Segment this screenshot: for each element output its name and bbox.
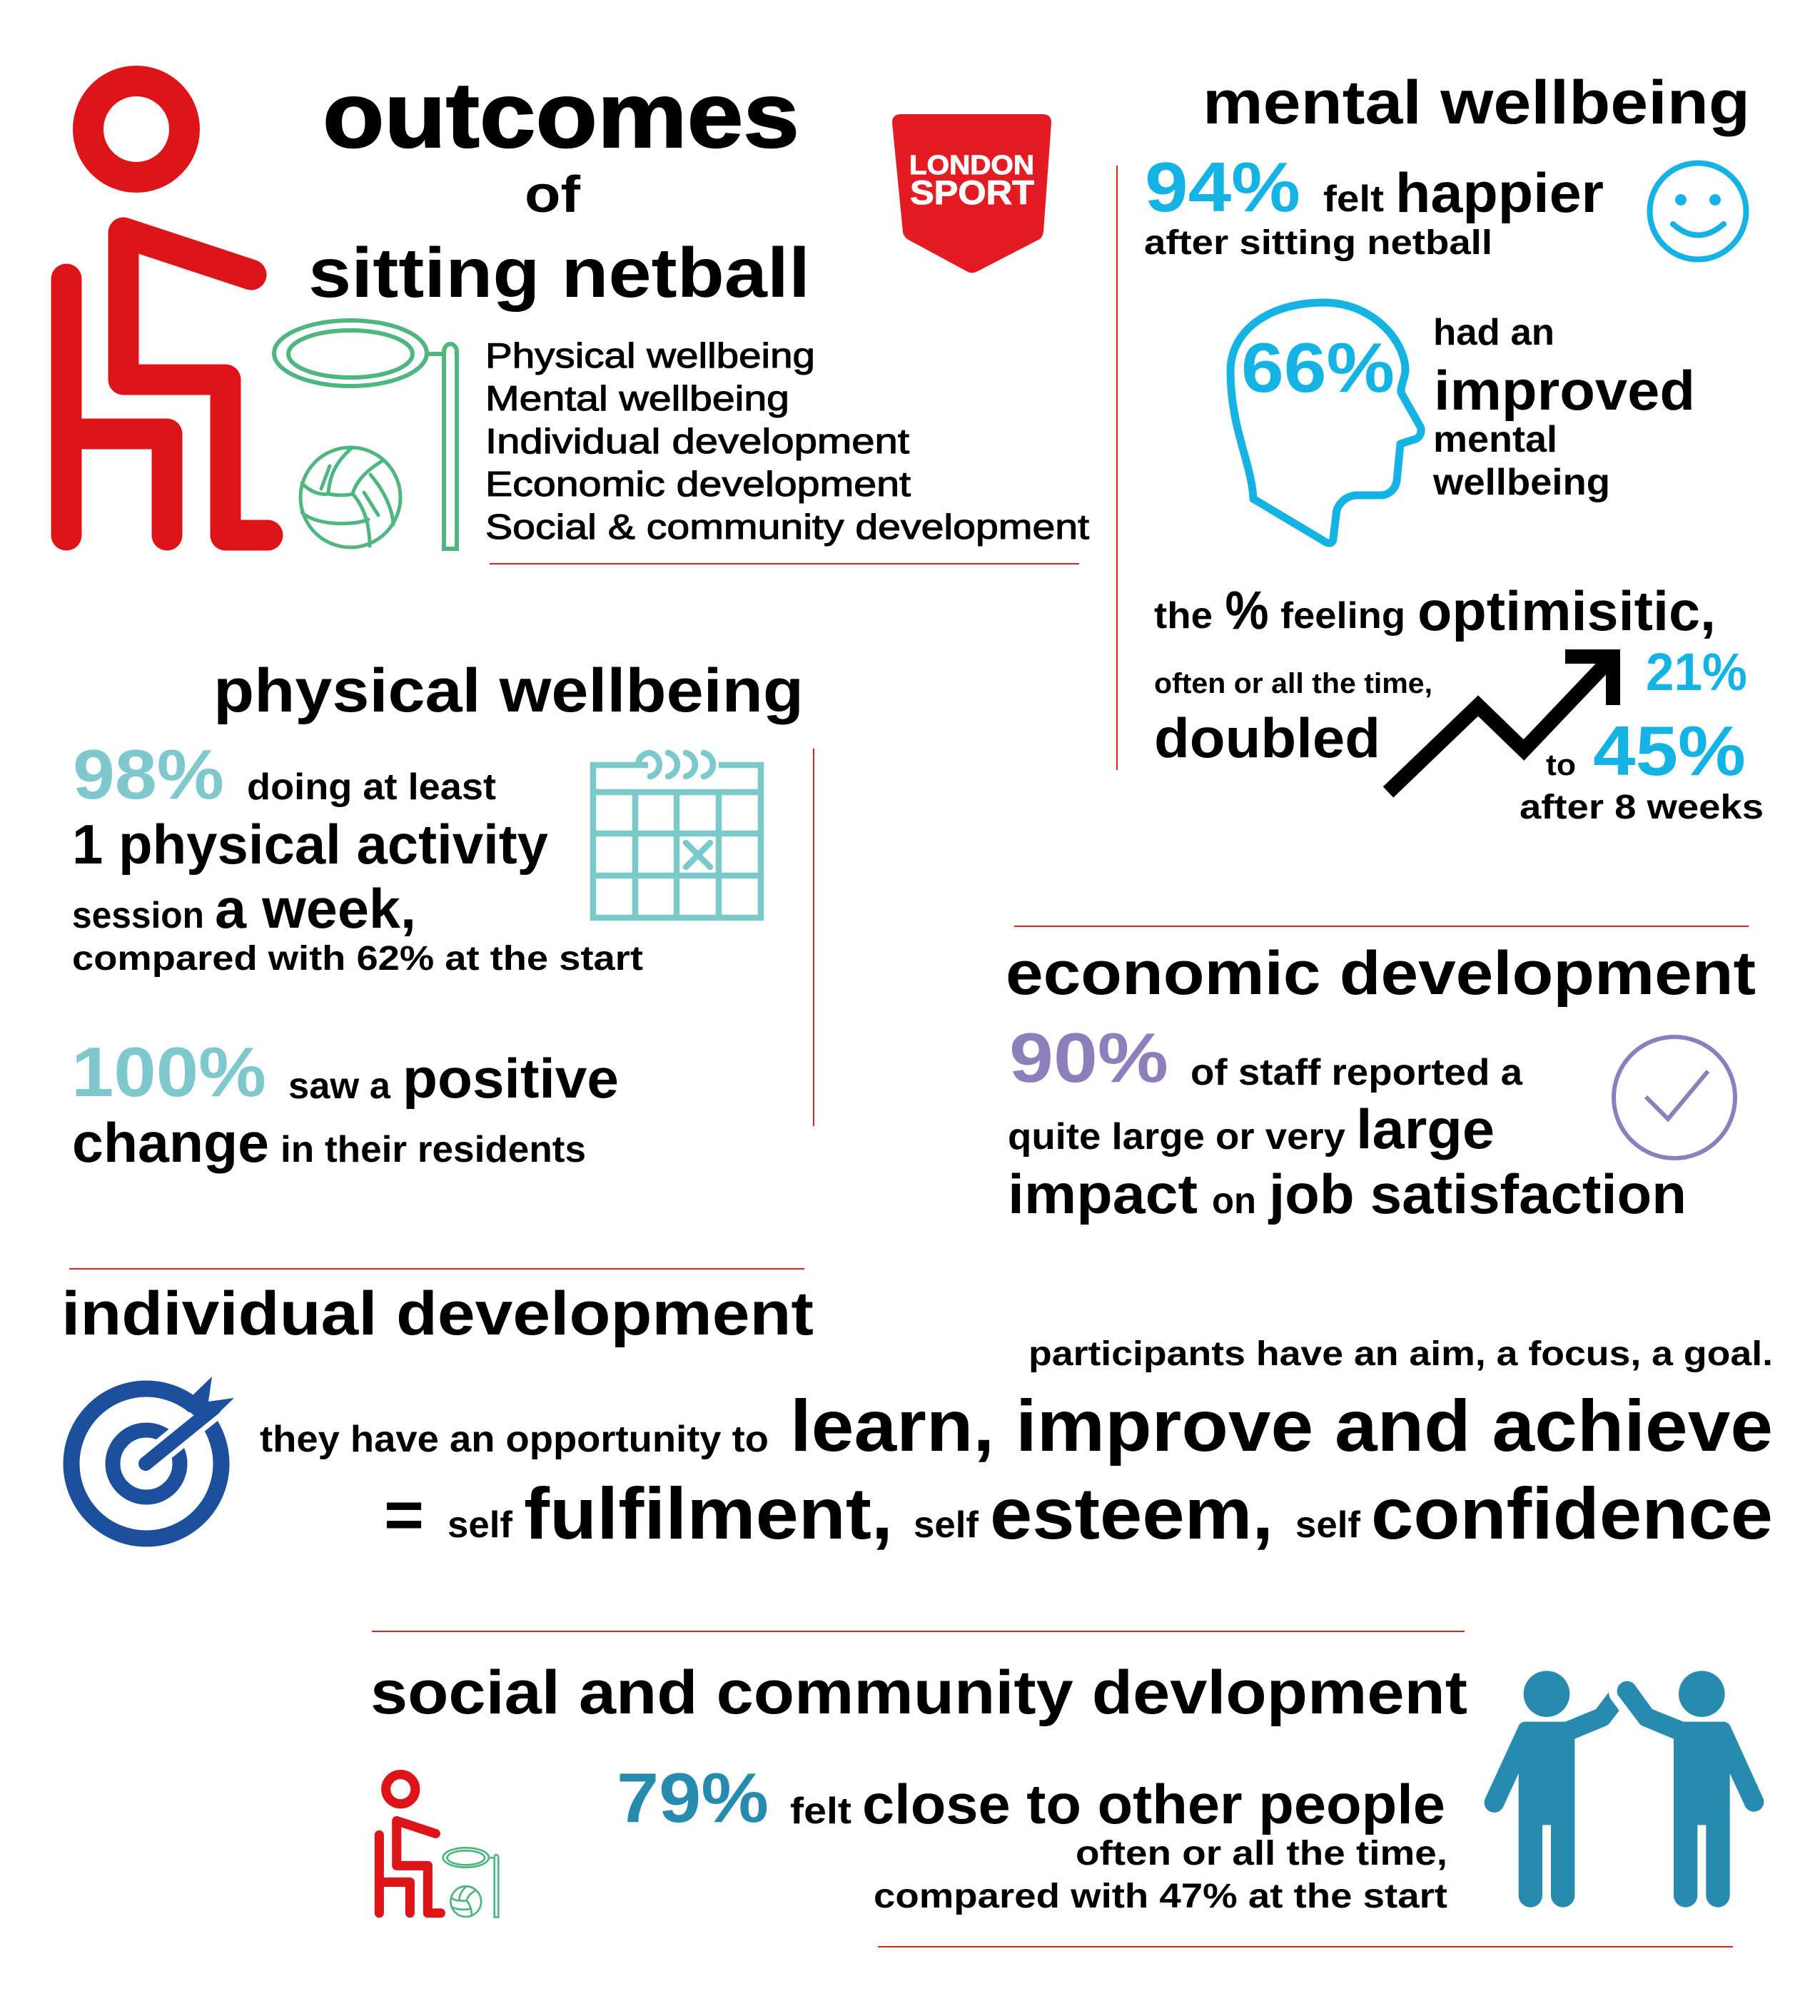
- stat: 100% positive change: [71, 1033, 619, 1174]
- text: self fulfilment, esteem, confidence: self: [1295, 1504, 1361, 1546]
- icon: check mark circle: [1614, 1037, 1735, 1158]
- panel: physical wellbeing: [71, 657, 814, 1174]
- stat: optimism doubled: optimisitic,: [1417, 579, 1716, 642]
- title: outcomes: [323, 63, 799, 167]
- text: learn, improve and achieve: they have an opportunity to: [260, 1419, 769, 1460]
- list of outcomes: Physical wellbeing: [485, 337, 815, 375]
- icon: smiley face: [1650, 163, 1746, 260]
- stat: 90% job satisfaction: quite large or very: [1008, 1116, 1345, 1158]
- stat: optimism doubled: feeling: [1280, 595, 1405, 637]
- text: self fulfilment, esteem, confidence: self: [448, 1504, 513, 1546]
- stat: 94% felt happier: happier: [1395, 161, 1604, 224]
- stat: 66% improved mental wellbeing: 66%: [1241, 328, 1395, 407]
- stat: 66% improved mental wellbeing: wellbeing: [1432, 462, 1610, 503]
- stat: 90% job satisfaction: 90%: [1009, 1018, 1168, 1097]
- panel: economic development: [1006, 926, 1756, 1225]
- stat: optimism doubled: 45%: [1593, 711, 1746, 790]
- stat: 94% felt happier: after sitting netball: [1144, 224, 1492, 262]
- text: self fulfilment, esteem, confidence: =: [384, 1476, 424, 1553]
- stat: 100% positive change: saw a: [288, 1065, 391, 1107]
- stat: optimism doubled: %: [1225, 582, 1268, 639]
- text: self fulfilment, esteem, confidence: confidence: [1371, 1473, 1773, 1554]
- stat: 100% positive change: positive: [403, 1047, 619, 1110]
- stat: 98% weekly activity: [72, 735, 643, 978]
- stat: 90% job satisfaction: large: [1356, 1098, 1495, 1160]
- icon: seated netball player with hoop and ball: [66, 81, 457, 549]
- stat: 98% weekly activity: 1 physical activity: [72, 813, 548, 876]
- stat: 79% felt close to other people: often or all the time,: [1076, 1835, 1447, 1873]
- title: [308, 63, 810, 312]
- stat: 79% felt close to other people: felt: [790, 1790, 851, 1832]
- text: learn, improve and achieve: learn, improve and achieve: [790, 1385, 1773, 1467]
- panel: social and community development: [370, 1631, 1764, 1947]
- logo: London Sport shield: [892, 114, 1051, 273]
- title: of: [525, 166, 581, 223]
- stat: optimism doubled: 21%: [1646, 642, 1747, 701]
- stat: 66% improved mental wellbeing: improved: [1434, 359, 1695, 422]
- stat: 100% positive change: in their residents: [280, 1129, 586, 1170]
- text: self fulfilment, esteem, confidence: fulfilment,: [524, 1473, 893, 1554]
- stat: 90% job satisfaction: of staff reported a: [1190, 1052, 1523, 1093]
- stat: 98% weekly activity: session: [72, 895, 204, 936]
- heading: social and community devlopment: social and community devlopment: [370, 1658, 1467, 1727]
- stat: 90% job satisfaction: job satisfaction: [1268, 1163, 1687, 1225]
- stat: 79% felt close to other people: 79%: [617, 1758, 769, 1837]
- stat: optimism doubled: after 8 weeks: [1520, 789, 1764, 826]
- text: self fulfilment, esteem, confidence: self: [914, 1504, 979, 1546]
- text: self fulfilment, esteem, confidence: esteem,: [990, 1473, 1273, 1554]
- list of outcomes: Economic development: [485, 465, 911, 504]
- stat: 98% weekly activity: a week,: [215, 877, 416, 940]
- stat: 66% improved mental wellbeing: mental: [1433, 419, 1557, 460]
- text: participants have an aim: participants have an aim, a focus, a goal.: [1028, 1335, 1773, 1373]
- stat: 94% felt happier: [1144, 148, 1604, 262]
- stat: 100% positive change: change: [72, 1111, 269, 1174]
- icon: small seated player: [379, 1775, 498, 1918]
- stat: 100% positive change: 100%: [71, 1033, 266, 1111]
- stat: 98% weekly activity: 98%: [73, 735, 224, 814]
- stat: 98% weekly activity: compared with 62% at the start: [72, 940, 643, 978]
- panel: mental wellbeing: [1117, 69, 1764, 826]
- icon: target with dart: [71, 1377, 234, 1539]
- stat: 66% improved mental wellbeing: [1241, 312, 1695, 503]
- stat: 90% job satisfaction: on: [1212, 1180, 1256, 1222]
- list of outcomes: Mental wellbeing: [485, 380, 789, 418]
- stat: 90% job satisfaction: [1008, 1018, 1687, 1225]
- icon: calendar: [593, 753, 761, 918]
- icon: two people high five: [1485, 1671, 1764, 1908]
- heading: individual development: individual development: [61, 1280, 814, 1348]
- stat: optimism doubled: doubled: [1154, 706, 1380, 769]
- title: sitting netball: [308, 233, 810, 312]
- heading: economic development: economic development: [1006, 939, 1756, 1008]
- stat: 66% improved mental wellbeing: had an: [1433, 312, 1554, 353]
- logo: London Sport shield: LONDON: [909, 151, 1034, 181]
- heading: mental wellbeing: mental wellbeing: [1203, 69, 1750, 137]
- list of outcomes: Individual development: [485, 422, 909, 461]
- stat: optimism doubled: the: [1154, 595, 1213, 637]
- icon: rising arrow: [1388, 649, 1620, 792]
- stat: 79% felt close to other people: close to other people: [862, 1773, 1445, 1835]
- stat: optimism doubled: [1154, 579, 1764, 826]
- stat: 79% felt close to other people: [617, 1758, 1447, 1915]
- heading: physical wellbeing: physical wellbeing: [213, 657, 804, 725]
- list of outcomes: Social & community development: [485, 508, 1089, 547]
- text: learn, improve and achieve: [260, 1385, 1773, 1467]
- stat: 79% felt close to other people: compared with 47% at the start: [874, 1878, 1447, 1915]
- stat: 98% weekly activity: doing at least: [247, 766, 496, 808]
- stat: optimism doubled: to: [1546, 748, 1576, 781]
- icon: netball hoop: [274, 320, 457, 549]
- logo: London Sport shield: SPORT: [910, 173, 1034, 211]
- stat: 94% felt happier: felt: [1323, 178, 1384, 220]
- stat: 94% felt happier: 94%: [1145, 148, 1300, 226]
- icon: head outline: [1230, 303, 1421, 543]
- text: self fulfilment, esteem, confidence: [384, 1473, 1773, 1554]
- stat: optimism doubled: often or all the time,: [1154, 668, 1432, 699]
- list of outcomes: [485, 337, 1089, 547]
- icon: seated player figure: [66, 81, 268, 535]
- icon: netball: [300, 447, 400, 547]
- stat: 90% job satisfaction: impact: [1008, 1163, 1198, 1225]
- panel: individual development: [61, 1269, 1773, 1554]
